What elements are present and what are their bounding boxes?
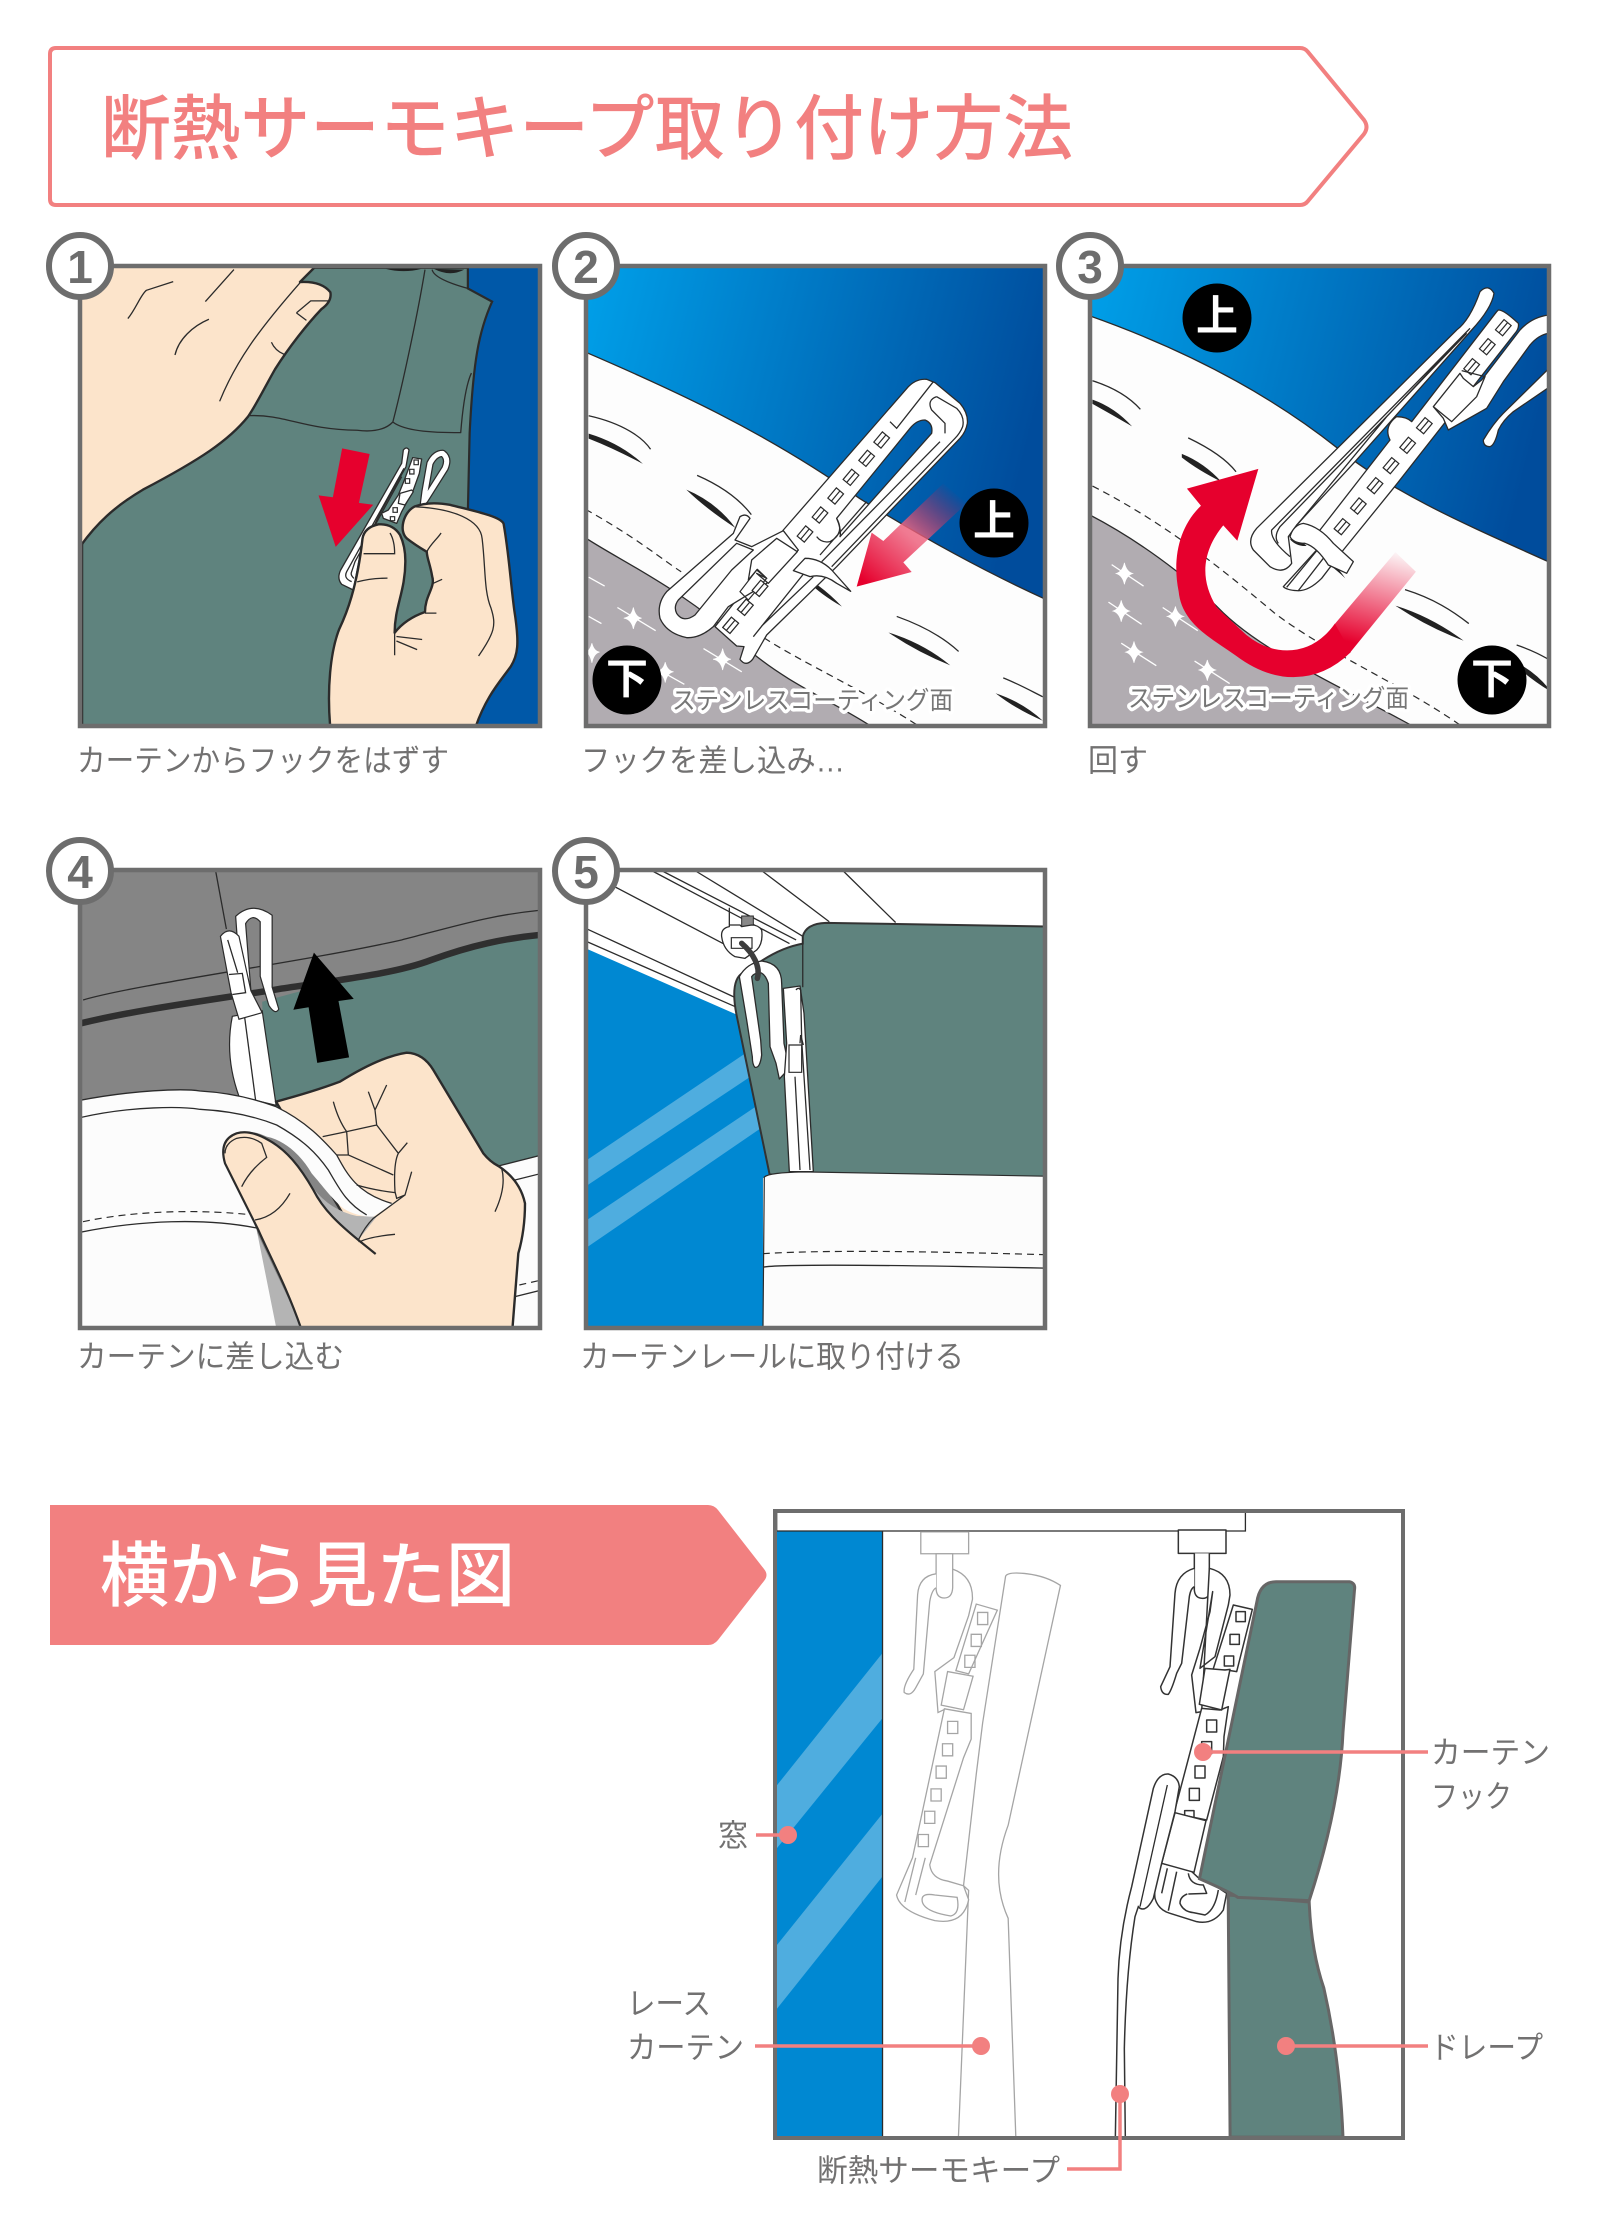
caption 2: フックを差し込み…	[581, 744, 845, 778]
hand and cloth	[78, 1053, 542, 1330]
step number 4	[49, 840, 111, 902]
drape	[1199, 1582, 1355, 2137]
callout: curtain hook: カーテン	[1431, 1736, 1550, 1770]
red rotate arrow	[1176, 469, 1351, 677]
badge: up	[960, 488, 1028, 558]
hook assembly	[1251, 288, 1550, 591]
rail	[777, 1512, 1245, 1531]
callout: lace curtain: レース	[627, 1986, 711, 2022]
title banner	[50, 48, 1366, 205]
sparkles	[586, 607, 731, 682]
label: stainless coated side: ステンレスコーティング面	[672, 687, 953, 715]
curtain	[82, 268, 492, 726]
caption 3: 回す	[1088, 744, 1148, 778]
step number 5: 5	[573, 846, 599, 898]
side view diagram	[775, 1511, 1403, 2138]
section banner: side view: 横から見た図	[100, 1538, 515, 1616]
fingers and palm	[276, 1053, 525, 1330]
callout: drape	[1277, 2030, 1543, 2066]
step number 1: 1	[67, 241, 93, 293]
label: stainless coated side: ステンレスコーティング面	[1128, 685, 1409, 713]
callout: curtain hook	[1194, 1736, 1550, 1814]
badge: down	[592, 646, 662, 714]
callout: heat-keep	[817, 2085, 1129, 2188]
thumb	[223, 1132, 358, 1330]
badge: down: 下	[606, 656, 648, 702]
badge: down	[1458, 646, 1526, 714]
arrow up	[293, 953, 354, 1063]
badge: down: 下	[1471, 656, 1513, 702]
title banner: 断熱サーモキープ取り付け方法	[101, 90, 1073, 170]
lace curtain	[897, 1532, 1060, 2137]
hook parts	[722, 908, 813, 1172]
panel 1: remove hook from curtain	[80, 266, 540, 729]
callout: lace curtain: カーテン	[627, 2030, 744, 2066]
callout: lace curtain	[627, 1986, 990, 2066]
front clip	[659, 515, 798, 638]
caption 5: カーテンレールに取り付ける	[580, 1340, 964, 1374]
drape	[734, 923, 1048, 1178]
heat-keep hook and strip	[1155, 1530, 1252, 1922]
window	[777, 1531, 883, 2137]
lace hook	[921, 1532, 969, 1554]
red arrow	[857, 483, 967, 587]
hook assembly	[659, 379, 967, 663]
panel 4: insert into curtain	[78, 870, 544, 1330]
badge: up	[1182, 284, 1252, 352]
curtain band	[586, 352, 1048, 727]
caption 4: カーテンに差し込む	[77, 1340, 344, 1374]
panel 2: insert hook	[586, 266, 1048, 727]
right cloth	[499, 1155, 538, 1326]
callout: heat-keep: 断熱サーモキープ	[817, 2154, 1060, 2188]
panel 3: rotate	[1089, 266, 1555, 727]
caption 1: カーテンからフックをはずす	[77, 744, 449, 778]
step number 3	[1059, 235, 1121, 297]
shadow	[255, 1188, 377, 1330]
callout: window: 窓	[718, 1818, 748, 1854]
badge: up: 上	[1196, 292, 1238, 340]
step number 2	[555, 235, 617, 297]
section banner: side view	[50, 1505, 766, 1645]
red arrow	[319, 448, 373, 547]
badge: up: 上	[973, 498, 1015, 544]
lower curtain	[763, 1172, 1048, 1331]
step number 2: 2	[573, 241, 599, 293]
heat-keep strip	[1115, 1774, 1179, 2138]
callout: curtain hook: フック	[1431, 1780, 1512, 1814]
step number 4: 4	[67, 846, 93, 898]
lower hand	[329, 503, 517, 729]
step number 1	[49, 235, 111, 297]
hook	[339, 448, 447, 590]
panel 5: attach to rail	[584, 870, 1048, 1331]
white cloth	[78, 1090, 393, 1330]
upper hand	[80, 266, 331, 546]
step number 5	[555, 840, 617, 902]
hooks	[230, 1011, 276, 1105]
callout: drape: ドレープ	[1430, 2030, 1543, 2066]
step number 3: 3	[1077, 241, 1103, 293]
callout: window	[718, 1818, 797, 1854]
